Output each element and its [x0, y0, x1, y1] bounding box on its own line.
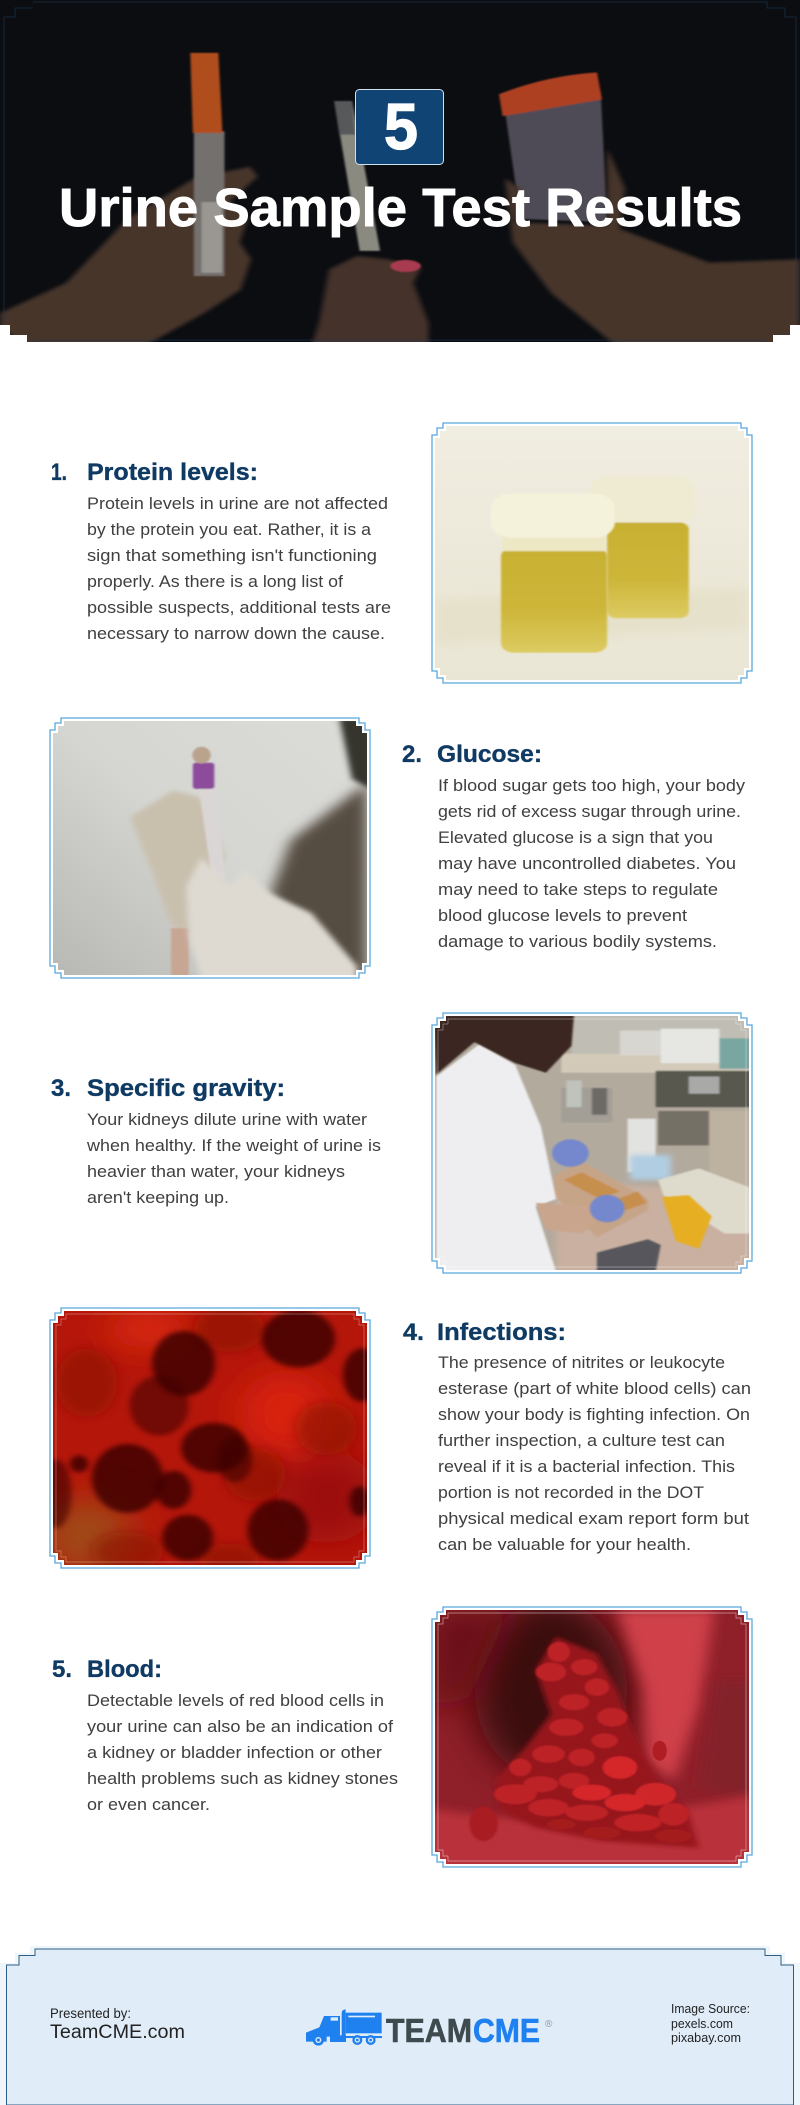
item 1 text [87, 494, 391, 643]
item 4 heading: Infections: [437, 1319, 566, 1346]
specimen container [499, 72, 607, 222]
item 1 text: by the protein you eat. Rather, it is a [87, 520, 372, 539]
number badge [356, 90, 444, 164]
logo wordmark [386, 2012, 553, 2049]
logo wordmark: ® [545, 2019, 553, 2030]
logo wordmark: CME [473, 2012, 540, 2049]
item 4 text: reveal if it is a bacterial infection. This [438, 1457, 735, 1476]
item 3 text [86, 1110, 381, 1207]
item 5 heading [52, 1656, 162, 1683]
left tube [190, 53, 224, 276]
white boxes [658, 1168, 750, 1233]
tube rack [554, 1161, 648, 1237]
item 5 text: health problems such as kidney stones [87, 1769, 398, 1788]
image source [671, 2002, 750, 2045]
item 2 text: gets rid of excess sugar through urine. [438, 802, 741, 821]
item 5 text: or even cancer. [87, 1795, 210, 1814]
gray rack [597, 1239, 661, 1272]
item 2 text: may need to take steps to regulate [438, 880, 718, 899]
header banner photo [0, 0, 800, 347]
presented by: TeamCME.com [50, 2022, 185, 2043]
item 2 text: Elevated glucose is a sign that you [438, 828, 713, 847]
right hand [505, 148, 800, 347]
presented by [50, 2006, 185, 2043]
item 1 text: possible suspects, additional tests are [87, 598, 391, 617]
item 4 text [438, 1353, 751, 1554]
item 2 heading: 2. [402, 741, 422, 768]
image card 3: laboratory technician [429, 1011, 755, 1276]
item 4 text: further inspection, a culture test can [438, 1431, 725, 1450]
item 3 text: when healthy. If the weight of urine is [86, 1136, 381, 1155]
item 2 text: damage to various bodily systems. [438, 932, 717, 951]
item 4 text: can be valuable for your health. [438, 1535, 691, 1554]
item 2 text: may have uncontrolled diabetes. You [438, 854, 736, 873]
item 4 text: show your body is fighting infection. On [438, 1405, 750, 1424]
coat [436, 1044, 556, 1272]
yellow bin [662, 1195, 712, 1249]
item 2 text: If blood sugar gets too high, your body [438, 776, 746, 795]
item 3 text: Your kidneys dilute urine with water [87, 1110, 367, 1129]
item 5 text [87, 1691, 398, 1814]
item 3 heading: Specific gravity: [87, 1075, 285, 1102]
item 5 text: a kidney or bladder infection or other [87, 1743, 382, 1762]
back jar [589, 477, 695, 618]
front glove [186, 857, 357, 982]
item 2 heading: Glucose: [437, 741, 542, 768]
item 4 heading: 4. [403, 1319, 424, 1346]
left hand [0, 167, 258, 347]
tube [192, 747, 226, 878]
counter [555, 1184, 749, 1270]
icon: truck logo [306, 2009, 382, 2046]
item 4 text: physical medical exam report form but [438, 1509, 749, 1528]
arm [171, 928, 189, 978]
item 5 heading: 5. [52, 1656, 72, 1683]
item 3 text: heavier than water, your kidneys [87, 1162, 345, 1181]
item 2 text: blood glucose levels to prevent [438, 906, 687, 925]
vessel shading [474, 1600, 628, 1781]
image source: Image Source: [671, 2002, 750, 2016]
image source: pexels.com [671, 2017, 733, 2031]
item 1 heading: Protein levels: [87, 459, 258, 486]
item 5 text: Detectable levels of red blood cells in [87, 1691, 384, 1710]
center strip [334, 101, 380, 251]
item 1 text: Protein levels in urine are not affected [87, 494, 388, 513]
cell pile [495, 1637, 699, 1848]
item 4 text: The presence of nitrites or leukocyte [438, 1353, 725, 1372]
item 4 text: portion is not recorded in the DOT [438, 1483, 704, 1502]
footer panel [0, 1946, 800, 2105]
item 5 text: your urine can also be an indication of [87, 1717, 393, 1736]
gloves [552, 1139, 624, 1222]
image card 5: red blood cells in vessel [429, 1600, 755, 1875]
item 3 heading: 3. [51, 1075, 71, 1102]
image source: pixabay.com [671, 2031, 741, 2045]
single cells [469, 1806, 498, 1841]
item 3 text: aren't keeping up. [87, 1188, 229, 1207]
number badge: 5 [384, 90, 418, 163]
image card 4: blood cells [41, 1306, 382, 1574]
item 2 text [438, 776, 746, 951]
shelves and wall [560, 1016, 749, 1186]
arm [534, 1202, 588, 1234]
presented by: Presented by: [50, 2006, 131, 2021]
front jar [491, 494, 615, 653]
item 1 text: necessary to narrow down the cause. [87, 624, 385, 643]
back glove [130, 790, 224, 936]
item 1 text: sign that something isn't functioning [87, 546, 377, 565]
item 4 text: esterase (part of white blood cells) can [438, 1379, 751, 1398]
item 1 heading: 1. [51, 459, 67, 486]
image card 2: gloved hands with tube [46, 714, 378, 982]
hair [434, 1015, 574, 1075]
item 1 text: properly. As there is a long list of [87, 572, 343, 591]
person [270, 783, 367, 982]
image card 1: urine sample jars [431, 422, 753, 684]
title: Urine Sample Test Results [59, 178, 742, 238]
center hand [311, 256, 429, 347]
item 5 heading: Blood: [87, 1656, 162, 1683]
pink nail [390, 260, 421, 272]
logo wordmark: TEAM [386, 2012, 472, 2049]
